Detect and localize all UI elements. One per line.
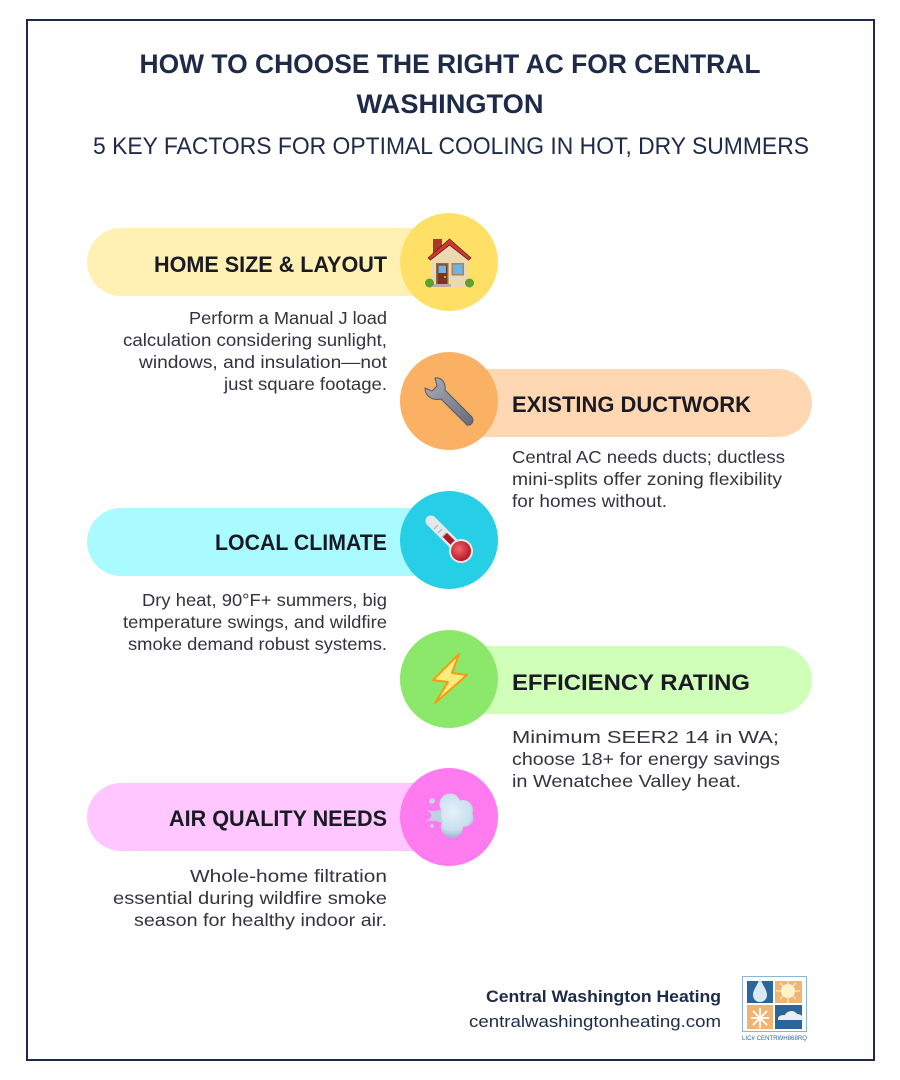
- icon circle: home size: [400, 213, 498, 311]
- icon: wrench: [425, 378, 473, 425]
- description: air quality: [113, 866, 387, 930]
- footer: company name: Central Washington Heating: [486, 988, 721, 1006]
- heading: efficiency: EFFICIENCY RATING: [512, 670, 750, 695]
- description: ductwork: for homes without.: [512, 491, 667, 511]
- description: climate: smoke demand robust systems.: [128, 634, 387, 654]
- title: [140, 49, 760, 119]
- description: ductwork: [512, 447, 785, 511]
- icon circle: climate: [400, 491, 498, 589]
- description: home size: just square footage.: [223, 374, 387, 394]
- icon circle: air quality: [400, 768, 498, 866]
- title: WASHINGTON: [356, 89, 544, 119]
- pill: efficiency: [460, 646, 812, 714]
- panel: existing ductwork: [400, 352, 812, 511]
- description: home size: calculation considering sunlight,: [123, 330, 387, 350]
- heading: climate: LOCAL CLIMATE: [215, 530, 387, 555]
- heading: air quality: AIR QUALITY NEEDS: [169, 806, 387, 831]
- icon: house: [425, 239, 474, 288]
- description: efficiency: in Wenatchee Valley heat.: [512, 771, 741, 791]
- icon circle: efficiency: [400, 630, 498, 728]
- logo: [742, 976, 807, 1042]
- icon: thermometer: [431, 521, 473, 563]
- description: efficiency: choose 18+ for energy savings: [512, 749, 780, 769]
- pill: climate: [87, 508, 440, 576]
- pill: ductwork: [460, 369, 812, 437]
- description: climate: temperature swings, and wildfire: [123, 612, 387, 632]
- icon: smoke puff: [426, 794, 474, 838]
- panel: local climate: [87, 491, 498, 654]
- description: efficiency: [512, 727, 780, 791]
- title: HOW TO CHOOSE THE RIGHT AC FOR CENTRAL: [140, 49, 760, 79]
- heading: home size: HOME SIZE & LAYOUT: [154, 252, 388, 277]
- panel: efficiency rating: [400, 630, 812, 791]
- description: air quality: season for healthy indoor air.: [134, 910, 387, 930]
- pill: air quality: [87, 783, 440, 851]
- pill: home size: [87, 228, 440, 296]
- heading: ductwork: EXISTING DUCTWORK: [512, 392, 751, 417]
- description: ductwork: Central AC needs ducts; ductless: [512, 447, 785, 467]
- panel: air quality needs: [87, 768, 498, 930]
- description: home size: Perform a Manual J load: [189, 308, 387, 328]
- icon: lightning bolt: [433, 654, 467, 703]
- subtitle: 5 KEY FACTORS FOR OPTIMAL COOLING IN HOT, DRY SUMMERS: [93, 133, 809, 160]
- logo: LIC# CENTRWH868RQ: [742, 1036, 807, 1042]
- panel: home size and layout: [87, 213, 498, 394]
- description: home size: [123, 308, 387, 394]
- description: home size: windows, and insulation—not: [138, 352, 387, 372]
- icon circle: ductwork: [400, 352, 498, 450]
- description: climate: [123, 590, 387, 654]
- description: air quality: essential during wildfire smoke: [113, 888, 387, 908]
- description: ductwork: mini-splits offer zoning flexibility: [512, 469, 782, 489]
- description: climate: Dry heat, 90°F+ summers, big: [142, 590, 387, 610]
- description: air quality: Whole-home filtration: [190, 866, 387, 886]
- footer: website: centralwashingtonheating.com: [469, 1013, 721, 1031]
- description: efficiency: Minimum SEER2 14 in WA;: [512, 727, 779, 747]
